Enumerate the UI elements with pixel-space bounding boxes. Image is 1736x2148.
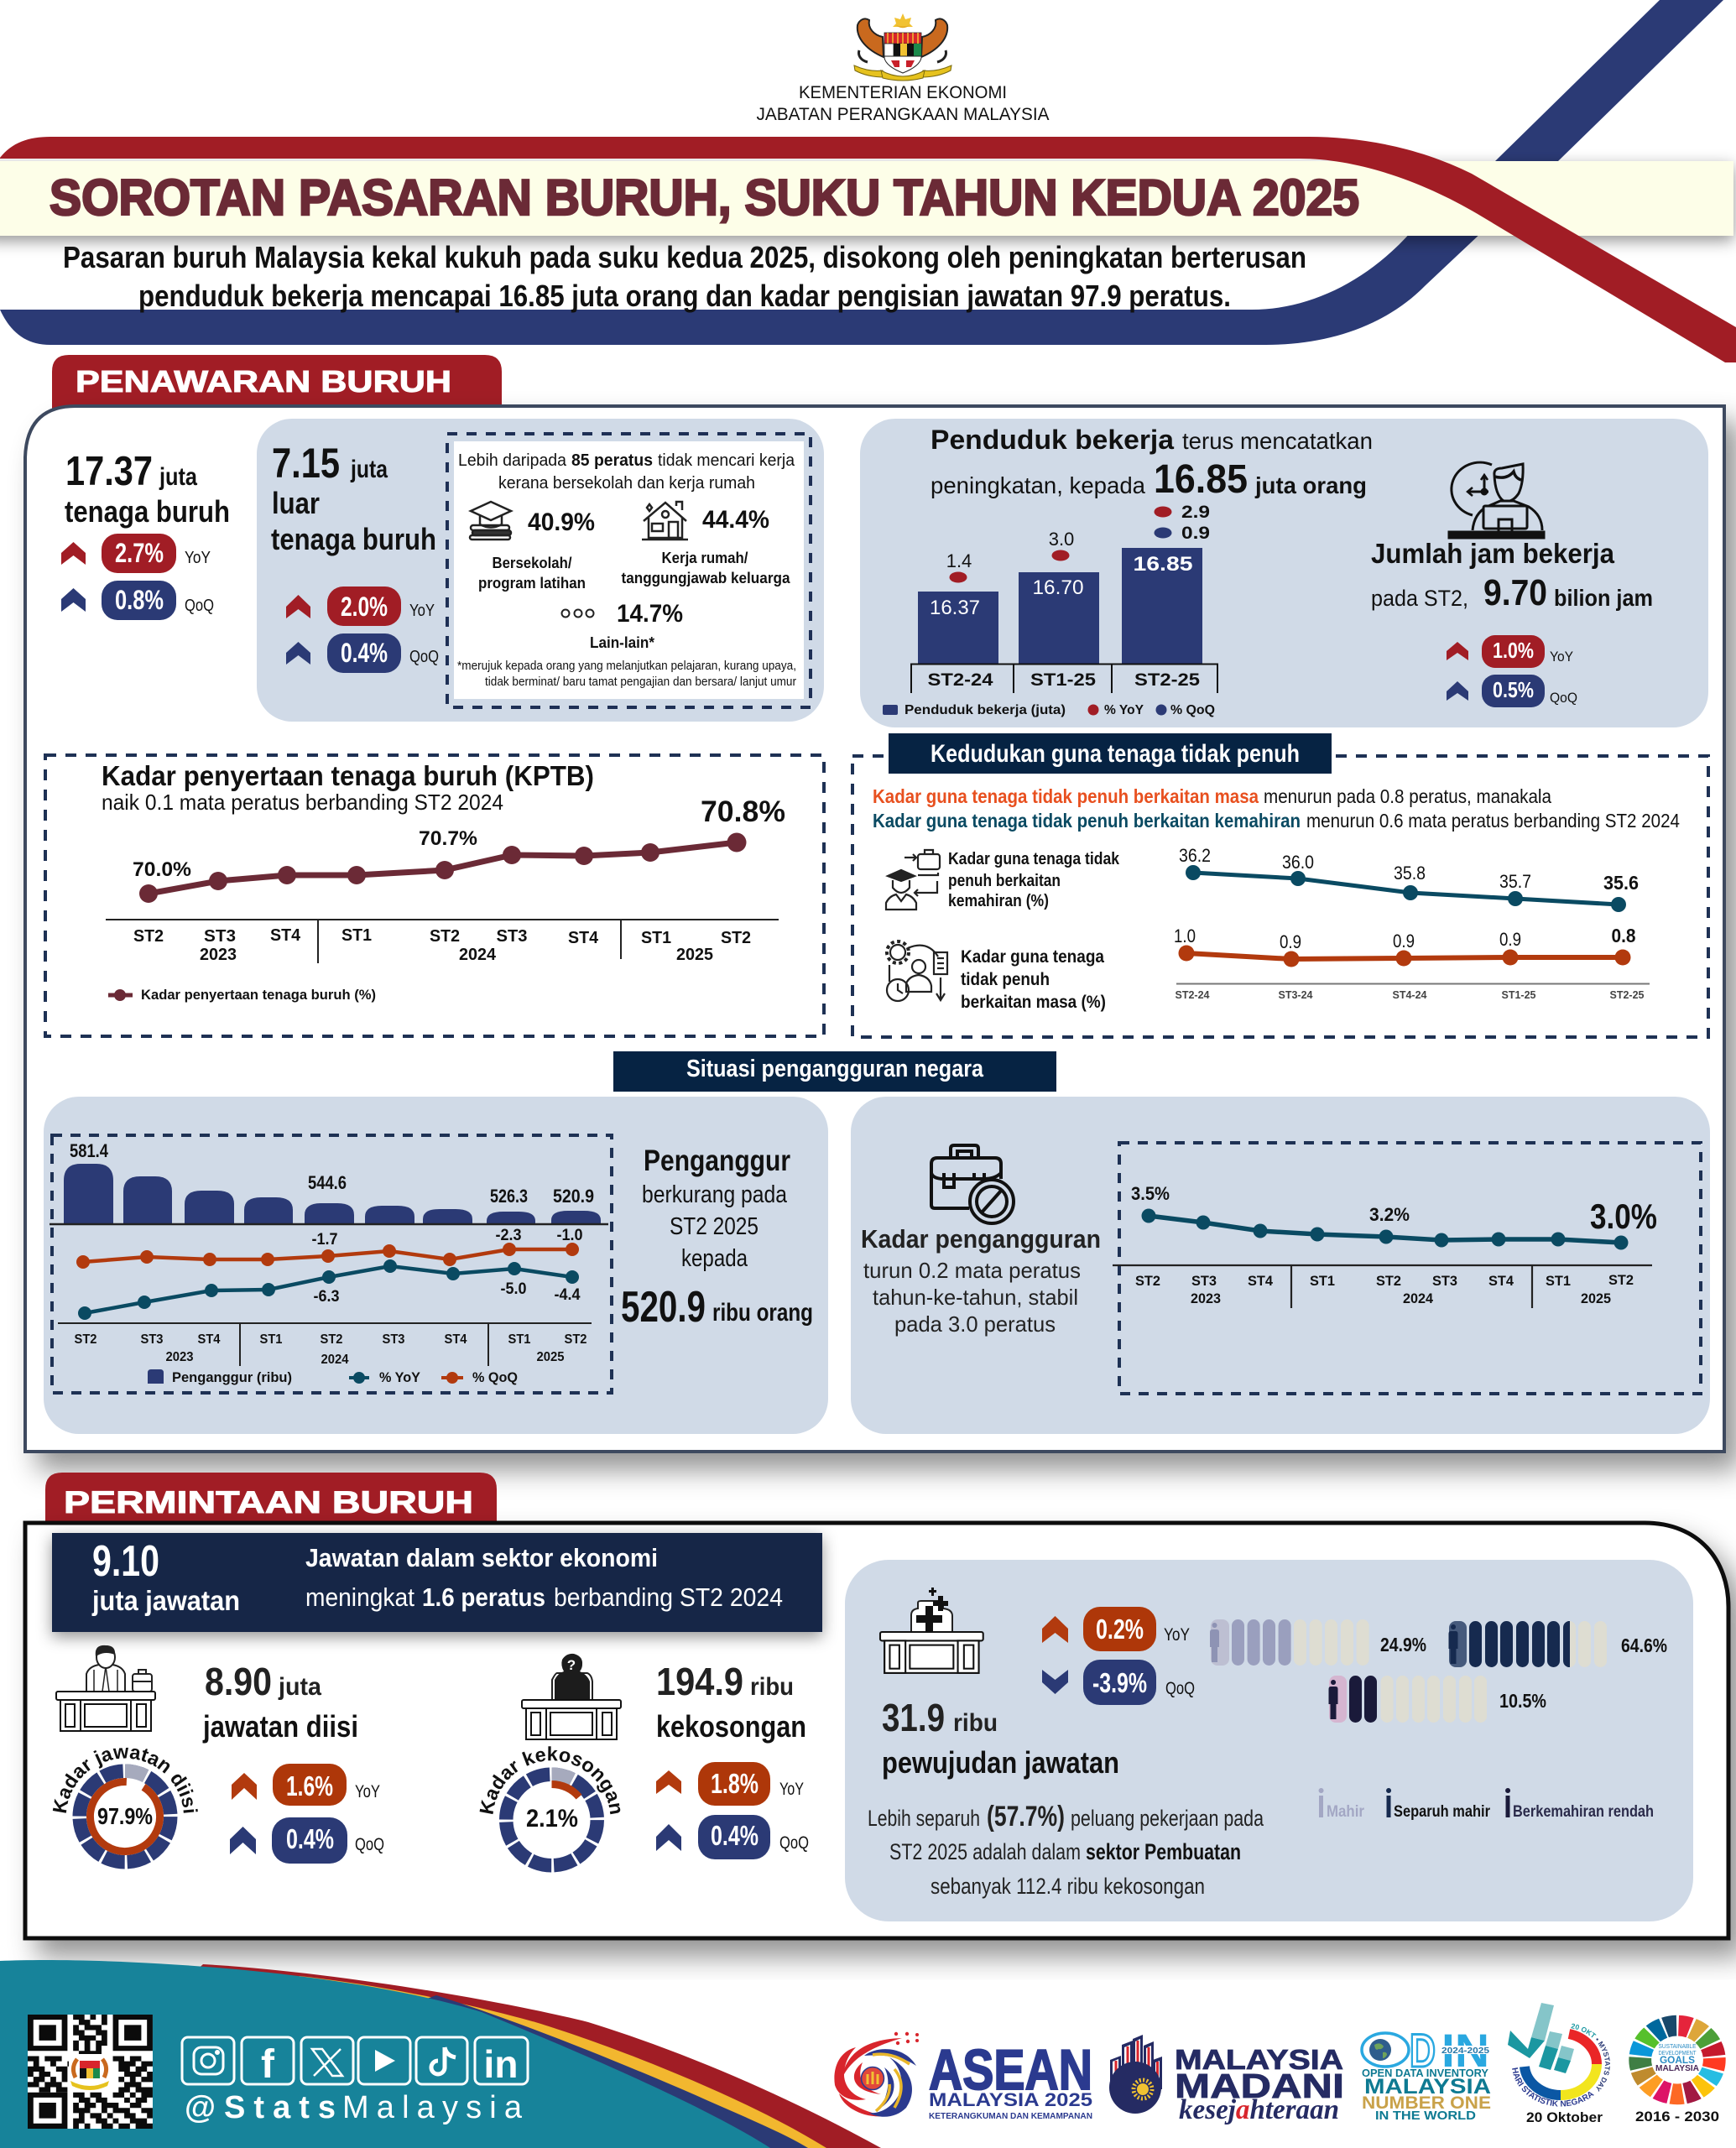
axis labels: guna tenaga: ST3-24 <box>1279 988 1313 1001</box>
value labels: penganggur lines: -4.4 <box>554 1286 581 1304</box>
block: jawatan diisi: 1.6% <box>286 1770 333 1801</box>
panel: penduduk bekerja: juta orang <box>1254 472 1367 498</box>
icon: three dots <box>562 609 594 618</box>
heading: kedudukan guna tenaga: Kedudukan guna tenaga tidak penuh <box>931 740 1300 768</box>
axis labels: penganggur: 2023 <box>166 1350 194 1364</box>
bar chart: penduduk bekerja: ST1-25 <box>1030 670 1096 690</box>
panel: penganggur: 544.6 <box>308 1172 347 1193</box>
logo: SDG Malaysia: GOALS <box>1660 2054 1695 2066</box>
breakdown box: program latihan <box>478 574 586 592</box>
panel: luar tenaga buruh: 7.15 <box>272 440 340 487</box>
legend: penganggur: % QoQ <box>472 1369 518 1385</box>
stat: jumlah jam bekerja: 0.5% <box>1493 677 1534 702</box>
heading: situasi pengangguran: Situasi pengangguran negara <box>686 1056 984 1082</box>
gauge: kadar kekosongan: 2.1% <box>526 1805 578 1833</box>
panel: luar tenaga buruh: 0.4% <box>341 638 388 668</box>
panel: kadar pengangguran <box>851 1097 1710 1434</box>
stat: tenaga buruh: 17.37 <box>65 449 153 494</box>
legend: skill levels: Mahir <box>1327 1803 1365 1821</box>
logo: MyStats Day: HARI STATISTIK NEGARA <box>1512 2067 1594 2107</box>
axis labels: guna tenaga: ST2-24 <box>1175 988 1210 1001</box>
value labels: penganggur lines: -5.0 <box>500 1280 527 1298</box>
icon: worker with clock <box>1449 462 1544 538</box>
legend: penganggur <box>148 1369 518 1385</box>
panel: KPTB chart: Kadar penyertaan tenaga buruh (KPTB) <box>102 760 594 791</box>
axis labels: kadar pengangguran: ST4 <box>1488 1273 1514 1289</box>
line chart: % QoQ <box>76 1243 579 1269</box>
icon: tiktok <box>431 2047 456 2074</box>
panel: pewujudan jawatan: 31.9 <box>882 1696 945 1739</box>
axis labels: penganggur: 2024 <box>321 1353 349 1367</box>
handle: StatsMalaysia: @Stats <box>185 2090 336 2125</box>
breakdown box: 40.9% <box>528 508 595 536</box>
block: kekosongan: YoY <box>779 1780 804 1799</box>
logo: Malaysia Madani: MALAYSIA <box>1175 2044 1343 2075</box>
breakdown box <box>447 434 811 707</box>
icon: briefcase prohibited <box>931 1145 1014 1223</box>
panel: guna tenaga tidak penuh: tidak penuh <box>961 970 1050 989</box>
logo: ASEAN Malaysia 2025: MALAYSIA 2025 <box>929 2089 1092 2110</box>
axis labels: penganggur: ST4 <box>198 1332 221 1347</box>
panel: guna tenaga tidak penuh: Kadar guna tenaga tidak <box>948 850 1120 868</box>
block: jawatan diisi: QoQ <box>355 1835 384 1854</box>
axis labels: KPTB: ST2 <box>133 927 164 946</box>
logo: MyStats Day: 20 OKT • MYSTATS DAY <box>1571 2024 1610 2092</box>
panel: KPTB chart: 70.0% <box>133 858 191 881</box>
panel: kadar pengangguran: Kadar pengangguran <box>861 1224 1101 1254</box>
logo: SDG Malaysia: SUSTAINABLE <box>1658 2044 1697 2050</box>
organisation name <box>757 83 1049 124</box>
stat: penganggur: Penganggur <box>644 1144 790 1177</box>
panel: guna tenaga tidak penuh: Kadar guna tenaga <box>961 947 1104 967</box>
logo: SDG Malaysia: DEVELOPMENT <box>1658 2051 1697 2057</box>
axis labels: kadar pengangguran: ST2 <box>1608 1272 1634 1288</box>
axis labels: penganggur: ST2 <box>564 1332 587 1347</box>
axis labels: KPTB: 2024 <box>459 946 497 964</box>
icon: house <box>642 502 688 540</box>
block: jawatan diisi: jawatan diisi <box>202 1709 358 1744</box>
icon: Madani hand emblem <box>1109 2035 1162 2114</box>
banner: jawatan: meningkat <box>305 1582 414 1612</box>
panel: pewujudan jawatan: YoY <box>1164 1625 1190 1645</box>
text block: sektor pembuatan: peluang pekerjaan pada <box>1071 1806 1264 1831</box>
panel: kadar pengangguran: pada 3.0 peratus <box>894 1311 1056 1337</box>
breakdown box: 85 peratus <box>571 451 653 470</box>
pictograph: separuh mahir <box>1448 1621 1667 1667</box>
axis labels: penganggur: 2025 <box>537 1350 565 1364</box>
panel: kadar pengangguran: 3.0% <box>1590 1197 1657 1236</box>
panel: luar tenaga buruh: YoY <box>409 602 435 620</box>
intro text: penduduk bekerja mencapai 16.85 juta orang dan kadar pengisian jawatan 97.9 peratus. <box>138 279 1231 313</box>
axis labels: guna tenaga: ST1-25 <box>1502 988 1535 1001</box>
axis labels: guna tenaga: ST2-25 <box>1609 988 1645 1001</box>
line chart: masa <box>1174 925 1636 967</box>
logo: ASEAN Malaysia 2025: KETERANGKUMAN DAN KEMAMPANAN <box>929 2111 1092 2121</box>
stat: penganggur: ST2 2025 <box>670 1213 759 1240</box>
panel: luar tenaga buruh: luar <box>272 486 320 520</box>
axis labels: KPTB: ST1 <box>341 926 372 945</box>
axis labels: KPTB: ST2 <box>430 927 460 946</box>
panel: pewujudan jawatan: QoQ <box>1165 1679 1195 1698</box>
breakdown box: Lain-lain* <box>590 634 654 651</box>
bar chart: penduduk bekerja: ST2-25 <box>1134 670 1200 690</box>
banner: jawatan: 1.6 peratus <box>422 1582 545 1612</box>
block: jawatan diisi: juta <box>278 1673 321 1701</box>
panel: luar tenaga buruh <box>257 419 824 722</box>
stat: jumlah jam bekerja: 1.0% <box>1493 638 1534 663</box>
stat: tenaga buruh: 0.8% <box>115 585 164 615</box>
header swoosh: red ribbon <box>0 137 1736 362</box>
bar chart: penduduk bekerja: 2.9 <box>1181 503 1210 522</box>
handle: StatsMalaysia: Malaysia <box>342 2090 523 2125</box>
logo: Malaysia Madani: MADANI <box>1175 2067 1344 2105</box>
icon: X <box>312 2049 342 2076</box>
bar chart: penduduk bekerja: 16.70 <box>1032 576 1084 599</box>
logo: SDG Malaysia: MALAYSIA <box>1655 2064 1699 2073</box>
value labels: penganggur lines <box>312 1227 582 1306</box>
value labels: penganggur lines: -1.7 <box>312 1231 337 1249</box>
stat: tenaga buruh: YoY <box>185 549 211 567</box>
banner: jawatan: berbanding ST2 2024 <box>554 1582 783 1612</box>
panel: penduduk bekerja: 16.85 <box>1154 457 1248 502</box>
breakdown box: Kerja rumah/ <box>661 549 748 566</box>
panel: penganggur: 520.9 <box>553 1186 594 1207</box>
line chart: KPTB <box>139 832 747 903</box>
icon: facebook: f <box>261 2042 275 2087</box>
logo: ODIN Malaysia: OPEN DATA INVENTORY <box>1362 2067 1488 2079</box>
axis labels: kadar pengangguran: ST2 <box>1135 1273 1160 1289</box>
breakdown box: Lebih daripada <box>458 451 567 470</box>
breakdown box: tidak mencari kerja <box>658 451 795 470</box>
line chart: masa: 0.9 <box>1499 929 1521 950</box>
axis labels: kadar pengangguran: ST4 <box>1248 1273 1274 1289</box>
panel: pewujudan jawatan: ribu <box>953 1709 998 1737</box>
icon: time and gear <box>887 941 947 1001</box>
line chart: masa: 0.9 <box>1393 931 1415 951</box>
line chart: masa: 1.0 <box>1174 925 1196 946</box>
icon: new job desk <box>880 1588 983 1673</box>
crest: Jata Negara <box>854 13 951 81</box>
panel: penganggur: 581.4 <box>70 1140 109 1161</box>
line chart: % YoY <box>78 1259 579 1320</box>
legend: penganggur: % YoY <box>379 1369 421 1385</box>
stat: jumlah jam bekerja: QoQ <box>1550 690 1577 706</box>
icon: ASEAN swirl <box>834 2032 919 2117</box>
pictograph: mahir <box>1210 1619 1426 1666</box>
icon: graduate skills <box>886 850 940 910</box>
line chart: kemahiran: 36.2 <box>1179 845 1211 866</box>
axis labels: kadar pengangguran: 2024 <box>1403 1290 1434 1306</box>
stat: jumlah jam bekerja: 9.70 <box>1483 572 1547 613</box>
axis labels: penganggur <box>74 1332 587 1367</box>
panel: pewujudan jawatan: 0.2% <box>1096 1614 1144 1645</box>
gauge: kadar jawatan diisi: 97.9% <box>97 1803 153 1829</box>
bar chart: penganggur <box>64 1164 601 1224</box>
legend: KPTB: Kadar penyertaan tenaga buruh (%) <box>141 987 376 1003</box>
legend: skill levels: Separuh mahir <box>1394 1803 1491 1821</box>
axis labels: KPTB <box>133 926 751 964</box>
axis labels: penganggur: ST1 <box>508 1332 531 1347</box>
panel: guna tenaga tidak penuh: berkaitan masa (%) <box>961 993 1106 1012</box>
panel: kadar pengangguran: turun 0.2 mata peratus <box>863 1258 1081 1283</box>
logo: ODIN Malaysia: NUMBER ONE <box>1362 2093 1491 2113</box>
panel: kadar pengangguran: 3.2% <box>1369 1204 1410 1225</box>
panel: guna tenaga tidak penuh <box>852 733 1708 1037</box>
panel: KPTB chart: 70.7% <box>419 827 477 850</box>
bar chart: penduduk bekerja: 0.9 <box>1181 524 1210 543</box>
panel: pewujudan jawatan <box>845 1560 1693 1921</box>
legend: skill levels <box>1319 1788 1654 1821</box>
axis labels: guna tenaga: ST4-24 <box>1393 988 1427 1001</box>
panel: guna tenaga tidak penuh: menurun 0.6 mata peratus berbanding ST2 2024 <box>1306 810 1680 832</box>
axis labels: KPTB: ST3 <box>204 927 236 946</box>
heading: kedudukan guna tenaga <box>889 733 1332 774</box>
legend: skill levels: Berkemahiran rendah <box>1513 1803 1654 1821</box>
logo: ODIN Malaysia: IN THE WORLD <box>1375 2109 1476 2123</box>
icon: filled desk <box>56 1645 155 1731</box>
block: kekosongan: 194.9 <box>656 1660 743 1703</box>
logo: SDG Malaysia <box>1624 2011 1730 2125</box>
banner: jawatan: Jawatan dalam sektor ekonomi <box>305 1543 658 1572</box>
line chart: masa: 0.8 <box>1611 925 1636 946</box>
QR code <box>28 2015 153 2129</box>
panel: penduduk bekerja: terus mencatatkan <box>1182 428 1373 454</box>
panel: guna tenaga tidak penuh: kemahiran (%) <box>948 892 1049 910</box>
legend: penganggur: Penganggur (ribu) <box>172 1369 292 1385</box>
panel: KPTB chart: naik 0.1 mata peratus berbanding ST2 2024 <box>102 790 503 815</box>
stat: jumlah jam bekerja <box>1371 538 1653 707</box>
panel: luar tenaga buruh: 2.0% <box>341 592 388 622</box>
axis labels: KPTB: ST4 <box>568 929 599 947</box>
stat: penganggur: kepada <box>681 1245 748 1272</box>
logo: ASEAN Malaysia 2025 <box>834 2032 1092 2121</box>
tab: Permintaan Buruh: PERMINTAAN BURUH <box>64 1485 473 1520</box>
axis labels: kadar pengangguran: ST3 <box>1432 1273 1457 1289</box>
axis labels: KPTB: ST3 <box>497 927 527 946</box>
block: kekosongan: 1.8% <box>711 1768 759 1799</box>
pictograph: berkemahiran rendah: 10.5% <box>1499 1690 1546 1712</box>
bar chart: penduduk bekerja: % YoY <box>1104 703 1144 717</box>
panel: penganggur <box>44 1097 828 1434</box>
bar chart: penduduk bekerja: 3.0 <box>1049 529 1074 550</box>
axis labels: kadar pengangguran: ST1 <box>1546 1273 1571 1289</box>
block: kekosongan: QoQ <box>779 1833 809 1853</box>
axis labels: KPTB: ST4 <box>270 926 301 945</box>
text block: sektor pembuatan: (57.7%) <box>987 1801 1065 1833</box>
axis labels: KPTB: 2023 <box>200 946 237 964</box>
logo: MyStats Day <box>1508 2003 1610 2125</box>
logo: SDG Malaysia: 2016 - 2030 <box>1635 2109 1719 2125</box>
panel: KPTB chart: 70.8% <box>701 795 785 828</box>
axis labels: kadar pengangguran: 2025 <box>1581 1290 1611 1306</box>
panel: KPTB chart <box>45 755 824 1036</box>
logo: ODIN Malaysia: IN <box>1441 2024 1489 2077</box>
panel: penduduk bekerja: peningkatan, kepada <box>931 472 1145 498</box>
block: jawatan diisi <box>52 1645 384 1869</box>
axis labels: KPTB: ST1 <box>641 929 671 947</box>
stat: tenaga buruh: QoQ <box>185 597 214 615</box>
title band <box>0 161 1733 236</box>
text block: sektor pembuatan: sebanyak 112.4 ribu kekosongan <box>931 1874 1205 1899</box>
stat: jumlah jam bekerja: pada ST2, <box>1371 586 1468 611</box>
panel: penduduk bekerja: Penduduk bekerja <box>931 425 1174 455</box>
gauge: kadar kekosongan <box>480 1746 621 1873</box>
block: jawatan diisi: 0.4% <box>286 1823 334 1854</box>
line chart: kemahiran: 35.7 <box>1499 871 1531 892</box>
block: jawatan diisi: 8.90 <box>205 1660 272 1703</box>
axis labels: guna tenaga <box>1175 988 1645 1001</box>
title: SOROTAN PASARAN BURUH, SUKU TAHUN KEDUA 2025 <box>50 169 1359 226</box>
block: jawatan diisi: YoY <box>355 1782 380 1801</box>
text block: sektor pembuatan: sektor Pembuatan <box>1086 1839 1241 1864</box>
stat: jumlah jam bekerja: bilion jam <box>1554 585 1653 611</box>
line chart: kemahiran: 36.0 <box>1282 852 1314 873</box>
panel: kadar pengangguran: 3.5% <box>1131 1183 1170 1204</box>
gauge: kadar jawatan diisi <box>52 1747 198 1869</box>
panel: penduduk bekerja <box>860 419 1708 727</box>
banner: jawatan <box>52 1533 822 1632</box>
value labels: penganggur lines: -2.3 <box>495 1227 522 1244</box>
icon: youtube play <box>375 2050 395 2072</box>
axis labels: KPTB: 2025 <box>676 946 713 964</box>
line chart: masa: 0.9 <box>1280 931 1301 952</box>
heading: situasi pengangguran <box>613 1051 1056 1092</box>
icon: vacant desk: ? <box>567 1657 576 1673</box>
bar chart: penduduk bekerja <box>883 503 1217 717</box>
handle: StatsMalaysia <box>185 2090 523 2125</box>
breakdown box: Bersekolah/ <box>492 554 572 571</box>
social media icons <box>182 2037 528 2087</box>
bar chart: penduduk bekerja: 1.4 <box>946 550 972 571</box>
stat: penganggur: 520.9 <box>621 1283 706 1332</box>
logo: ODIN Malaysia: 2024-2025 <box>1441 2046 1490 2056</box>
text block: sektor pembuatan: Lebih separuh <box>868 1806 980 1831</box>
tab: Penawaran Buruh <box>52 355 502 411</box>
logo: ODIN Malaysia: D <box>1410 2024 1436 2077</box>
footer swoosh <box>0 1960 881 2148</box>
axis labels: penganggur: ST4 <box>445 1332 467 1347</box>
panel: luar tenaga buruh: tenaga buruh <box>271 522 436 556</box>
stat: penganggur: berkurang pada <box>642 1181 788 1208</box>
axis labels: kadar pengangguran: ST2 <box>1376 1273 1401 1289</box>
panel: pewujudan jawatan: pewujudan jawatan <box>882 1745 1119 1780</box>
panel: luar tenaga buruh: juta <box>350 456 388 483</box>
panel: kadar pengangguran: tahun-ke-tahun, stabil <box>873 1285 1078 1310</box>
breakdown box: *merujuk kepada orang yang melanjutkan pelajaran, kurang upaya, <box>457 659 796 673</box>
breakdown box: 14.7% <box>617 600 683 628</box>
logo: Malaysia Madani <box>1109 2035 1344 2125</box>
panel: guna tenaga tidak penuh: penuh berkaitan <box>948 872 1061 890</box>
panel: pewujudan jawatan: -3.9% <box>1092 1667 1147 1698</box>
text block: sektor pembuatan <box>868 1801 1264 1899</box>
block: kekosongan: kekosongan <box>656 1709 806 1744</box>
stat: penganggur: ribu orang <box>712 1299 813 1327</box>
logo: ODIN Malaysia: MALAYSIA <box>1364 2075 1491 2098</box>
axis labels: kadar pengangguran <box>1135 1272 1634 1306</box>
logo: Malaysia Madani: kesejahteraan <box>1179 2094 1339 2125</box>
panel: guna tenaga tidak penuh: Kadar guna tenaga tidak penuh berkaitan masa <box>873 785 1259 807</box>
axis labels: penganggur: ST2 <box>321 1332 343 1347</box>
pictograph: separuh mahir: 64.6% <box>1621 1634 1667 1656</box>
pictograph: mahir: 24.9% <box>1380 1634 1426 1655</box>
tab: Penawaran Buruh: PENAWARAN BURUH <box>76 364 451 399</box>
block: kekosongan <box>480 1653 809 1873</box>
block: kekosongan: 0.4% <box>711 1820 759 1851</box>
stat: tenaga buruh <box>61 449 230 620</box>
banner: jawatan: juta jawatan <box>91 1585 240 1616</box>
stat: penganggur <box>621 1144 813 1332</box>
gauge: kadar kekosongan: Kadar kekosongan <box>480 1746 621 1814</box>
axis labels: kadar pengangguran: 2023 <box>1191 1290 1221 1306</box>
axis labels: penganggur: ST3 <box>383 1332 405 1347</box>
breakdown box: kerana bersekolah dan kerja rumah <box>498 473 755 493</box>
logo: ODIN Malaysia <box>1362 2024 1491 2123</box>
axis labels: kadar pengangguran: ST3 <box>1191 1273 1217 1289</box>
gauge: kadar jawatan diisi: Kadar jawatan diisi <box>52 1747 198 1813</box>
bar chart: penduduk bekerja: 16.37 <box>930 597 980 619</box>
icon: graduation books <box>470 502 511 540</box>
icon: linkedin: in <box>484 2042 518 2086</box>
breakdown box: tidak berminat/ baru tamat pengajian dan bersara/ lanjut umur <box>485 675 796 689</box>
block: kekosongan: ribu <box>750 1673 794 1701</box>
stat: jumlah jam bekerja: YoY <box>1550 649 1573 665</box>
value labels: penganggur lines: -1.0 <box>557 1227 582 1244</box>
text block: sektor pembuatan: ST2 2025 adalah dalam <box>889 1839 1081 1864</box>
axis labels: kadar pengangguran: ST1 <box>1310 1273 1335 1289</box>
organisation name: KEMENTERIAN EKONOMI <box>799 83 1007 102</box>
breakdown box: tanggungjawab keluarga <box>621 569 790 587</box>
pictograph: berkemahiran rendah <box>1329 1676 1546 1723</box>
line chart: kadar pengangguran <box>1141 1208 1628 1250</box>
panel: penganggur: 526.3 <box>490 1186 528 1207</box>
bar chart: penduduk bekerja: 16.85 <box>1133 553 1193 576</box>
panel: guna tenaga tidak penuh: menurun pada 0.8 peratus, manakala <box>1264 785 1551 807</box>
logo: MyStats Day: 20 Oktober <box>1526 2109 1603 2125</box>
stat: tenaga buruh: juta <box>159 463 197 491</box>
intro text <box>63 240 1306 313</box>
axis labels: KPTB: ST2 <box>721 929 751 947</box>
panel: penawaran buruh frame <box>25 406 1724 1452</box>
header swoosh: navy ribbon <box>0 0 1723 345</box>
bar chart: penduduk bekerja: % QoQ <box>1170 703 1215 717</box>
organisation name: JABATAN PERANGKAAN MALAYSIA <box>757 105 1049 124</box>
axis labels: penganggur: ST1 <box>260 1332 283 1347</box>
line chart: kemahiran: 35.8 <box>1394 863 1426 884</box>
stat: tenaga buruh: tenaga buruh <box>65 494 230 529</box>
banner: jawatan: 9.10 <box>92 1537 159 1586</box>
value labels: penganggur lines: -6.3 <box>314 1288 339 1306</box>
line chart: kemahiran <box>1179 845 1639 912</box>
bar chart: penduduk bekerja: Penduduk bekerja (juta) <box>904 703 1066 717</box>
stat: jumlah jam bekerja: Jumlah jam bekerja <box>1371 538 1615 569</box>
logo: ASEAN Malaysia 2025: ASEAN <box>929 2038 1092 2102</box>
breakdown box: 44.4% <box>702 506 769 534</box>
icon: vacant desk <box>522 1654 621 1739</box>
axis labels: penganggur: ST2 <box>74 1332 97 1347</box>
tab: Permintaan Buruh <box>45 1473 497 1531</box>
bar chart: penduduk bekerja: ST2-24 <box>928 670 993 690</box>
line chart: kemahiran: 35.6 <box>1603 872 1639 894</box>
panel: permintaan buruh frame <box>25 1523 1728 1938</box>
icon: instagram <box>194 2047 223 2074</box>
stat: tenaga buruh: 2.7% <box>115 538 164 568</box>
intro text: Pasaran buruh Malaysia kekal kukuh pada suku kedua 2025, disokong oleh peningkatan berterusan <box>63 240 1306 274</box>
panel: guna tenaga tidak penuh: Kadar guna tenaga tidak penuh berkaitan kemahiran <box>873 810 1301 832</box>
axis labels: penganggur: ST3 <box>141 1332 164 1347</box>
panel: luar tenaga buruh: QoQ <box>409 648 439 666</box>
